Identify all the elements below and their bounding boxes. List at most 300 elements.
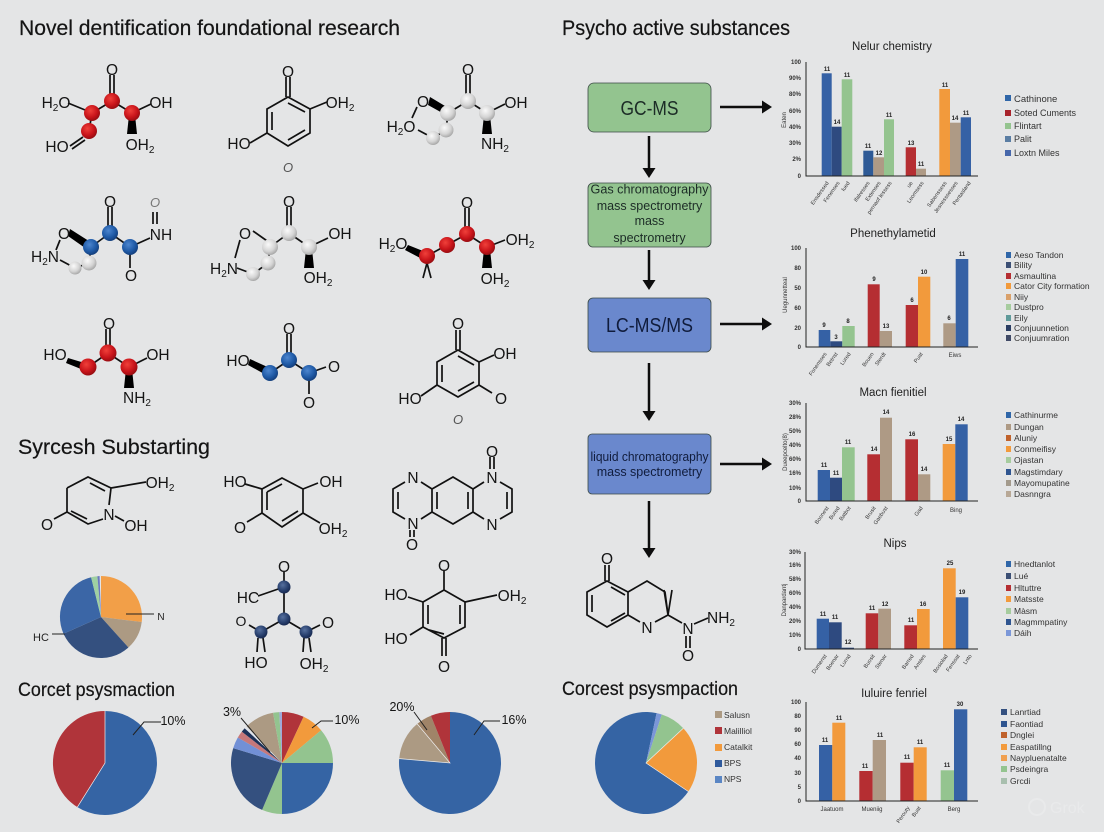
value labels: 11 bbox=[869, 606, 876, 612]
molecule: substituted ring: OH bbox=[319, 521, 342, 538]
molecule: red chain 1: OH bbox=[126, 137, 149, 154]
value labels: 11 bbox=[944, 763, 951, 769]
value labels: 14 bbox=[871, 447, 878, 453]
molecule: substituted ring: O bbox=[234, 520, 246, 537]
molecule: red chain 2: OH bbox=[506, 232, 529, 249]
molecule: bicyclic rings: O bbox=[486, 444, 498, 461]
heading: composition left: Corcet psysmaction bbox=[18, 680, 175, 701]
legend: Flintart bbox=[1014, 121, 1042, 131]
value labels: 16 bbox=[920, 602, 927, 608]
legend: Cathinone bbox=[1014, 94, 1057, 105]
value labels: 15 bbox=[946, 437, 953, 443]
molecule: white chain 2: OH bbox=[304, 270, 327, 287]
flow box: gas chromatography: Gas chromatography bbox=[590, 182, 709, 196]
molecule: white chain 1 bbox=[387, 62, 528, 155]
x labels: Jesnesssesses bbox=[933, 181, 960, 215]
legend: Lanrtiad bbox=[1010, 707, 1041, 717]
x labels: Eiws bbox=[949, 353, 961, 359]
molecule: red chain 2: H bbox=[379, 236, 390, 253]
molecule: red chain 3: 2 bbox=[145, 398, 151, 409]
y axis ticks: 5 bbox=[798, 785, 802, 791]
bars bbox=[817, 568, 968, 649]
value labels: 11 bbox=[917, 740, 924, 746]
x labels: Fenssat bbox=[945, 653, 962, 673]
legend: Magstimdary bbox=[1014, 467, 1063, 477]
y axis label: Danpardantj bbox=[782, 584, 788, 616]
y axis ticks: 40 bbox=[794, 756, 802, 762]
value labels: 19 bbox=[959, 590, 966, 596]
molecule: bicyclic amide: 2 bbox=[729, 618, 735, 629]
x labels: Lurnd bbox=[840, 654, 853, 669]
legend: Dustpro bbox=[1014, 302, 1044, 312]
y axis ticks: 60% bbox=[789, 457, 802, 463]
y axis ticks: 50 bbox=[794, 286, 802, 292]
y axis ticks: 30% bbox=[789, 401, 802, 407]
molecule: benzene ring 1: OH bbox=[326, 95, 349, 112]
x labels bbox=[814, 505, 962, 526]
value labels: 8 bbox=[846, 319, 850, 325]
y axis ticks: 100 bbox=[791, 60, 802, 66]
chart title: Iuluire fenriel bbox=[861, 688, 927, 700]
legend: Magmmpatiny bbox=[1014, 617, 1068, 627]
x labels: Bosiolad bbox=[933, 654, 950, 674]
molecule: white chain 1: H bbox=[387, 119, 398, 136]
value labels: 11 bbox=[844, 73, 851, 79]
value labels: 11 bbox=[918, 162, 925, 168]
x labels: Lnto bbox=[963, 654, 974, 666]
bars bbox=[819, 709, 967, 801]
molecule: bicyclic rings: O bbox=[406, 537, 418, 554]
value labels: 9 bbox=[822, 323, 826, 329]
molecule: benzene ring 2: O bbox=[453, 412, 463, 427]
molecule: blue chain 2: HO bbox=[226, 353, 250, 370]
pie: small composition bbox=[33, 576, 165, 658]
flow box: gas chromatography: mass spectrometry bbox=[597, 199, 703, 213]
value labels: 16 bbox=[909, 432, 916, 438]
y axis ticks: 0 bbox=[798, 799, 802, 805]
bars bbox=[822, 73, 971, 176]
heading: composition right: Corcest psysmpaction bbox=[562, 679, 738, 700]
y axis ticks bbox=[789, 401, 802, 505]
arrow: down 4 bbox=[642, 501, 656, 558]
watermark: Grok: Grok bbox=[1050, 800, 1086, 817]
molecule: white chain 1: O bbox=[417, 94, 429, 111]
molecule: pyridine ring: O bbox=[41, 517, 53, 534]
y axis ticks: 90 bbox=[794, 728, 802, 734]
value labels: 11 bbox=[886, 113, 893, 119]
x labels: Puat bbox=[913, 351, 925, 364]
legend: right composition: NPS bbox=[724, 774, 742, 784]
flow box: liquid chromatography: liquid chromatography bbox=[590, 450, 709, 464]
flow box: GC-MS bbox=[588, 83, 711, 132]
legend: Bility bbox=[1014, 260, 1033, 270]
legend: Easpatillng bbox=[1010, 742, 1052, 752]
value labels: 11 bbox=[959, 252, 966, 258]
molecule: blue chain 1: O bbox=[58, 226, 70, 243]
molecule: navy ball and stick: OH bbox=[300, 656, 323, 673]
molecule: white chain 2 bbox=[210, 194, 352, 289]
pie: mostly blue bbox=[389, 700, 527, 814]
molecule: bicyclic rings: N bbox=[486, 517, 498, 534]
x labels: Buosit bbox=[863, 653, 877, 670]
pie: multi slice: 10% bbox=[334, 713, 360, 727]
molecule: white chain 2: OH bbox=[328, 226, 352, 243]
value labels: 11 bbox=[877, 733, 884, 739]
legend: right composition: Malilliol bbox=[724, 726, 752, 736]
molecule: white chain 2: N bbox=[227, 261, 238, 278]
x labels: Stenar bbox=[874, 654, 889, 670]
chart title: Nelur chemistry bbox=[852, 41, 932, 53]
legend: Hltuttre bbox=[1014, 583, 1042, 593]
pie: two slice bbox=[53, 711, 186, 815]
y axis ticks: 2% bbox=[792, 157, 802, 163]
y axis ticks bbox=[791, 246, 802, 351]
bars bbox=[818, 418, 968, 501]
flow box: gas chromatography: spectrometry bbox=[613, 231, 686, 245]
x labels: Brusit bbox=[865, 505, 878, 521]
value labels: 3 bbox=[834, 335, 838, 341]
y axis ticks: 20% bbox=[789, 619, 802, 625]
arrow: down 1 bbox=[642, 136, 656, 178]
x labels: Perouty bbox=[896, 806, 912, 825]
chart title: Macn fienitiel bbox=[859, 387, 927, 399]
molecule: bicyclic amide: N bbox=[682, 621, 694, 638]
y axis ticks: 80% bbox=[789, 92, 802, 98]
value labels: 14 bbox=[834, 120, 841, 126]
molecule: red chain 2: O bbox=[461, 195, 473, 212]
value labels: 12 bbox=[876, 151, 883, 157]
legend: Matsste bbox=[1014, 594, 1044, 604]
legend: Conmeifisy bbox=[1014, 444, 1057, 454]
legend: Loxtn Miles bbox=[1014, 148, 1060, 158]
molecule: white chain 1: O bbox=[403, 119, 415, 136]
y axis ticks: 0 bbox=[798, 499, 802, 505]
y axis ticks: 0 bbox=[798, 174, 802, 180]
watermark: Grok bbox=[1029, 799, 1086, 817]
x labels: Mueniig bbox=[861, 807, 883, 813]
y axis ticks: 16% bbox=[789, 471, 802, 477]
molecule: substituted ring: 2 bbox=[342, 529, 348, 540]
molecule: quinone ring: HO bbox=[384, 631, 408, 648]
molecule: red chain 2: 2 bbox=[504, 279, 510, 290]
value labels bbox=[821, 410, 965, 477]
molecule: blue chain 1 bbox=[31, 194, 172, 285]
molecule: red chain 2: O bbox=[395, 236, 407, 253]
pie: small composition: HC bbox=[33, 632, 49, 644]
molecule: benzene ring 1: O bbox=[282, 64, 294, 81]
legend: Conjuumration bbox=[1014, 333, 1070, 343]
x labels bbox=[808, 351, 961, 377]
molecule: red chain 1: H bbox=[42, 95, 53, 112]
x labels: Bouen bbox=[862, 352, 876, 368]
value labels: 11 bbox=[862, 764, 869, 770]
value labels: 11 bbox=[865, 144, 872, 150]
molecule: bicyclic rings: N bbox=[486, 470, 498, 487]
molecule: benzene ring 2: O bbox=[495, 391, 507, 408]
legend: right composition: BPS bbox=[724, 758, 741, 768]
x labels: Jaatuom bbox=[820, 807, 844, 813]
y axis ticks: 10% bbox=[789, 486, 802, 492]
pie: mostly blue: 20% bbox=[389, 700, 415, 714]
molecule: benzene ring 1: HO bbox=[227, 136, 251, 153]
pie: right composition bbox=[595, 712, 697, 814]
y axis ticks: 28% bbox=[789, 415, 802, 421]
x labels: ue bbox=[906, 181, 915, 189]
axes bbox=[806, 62, 978, 176]
y axis ticks: 80 bbox=[794, 714, 802, 720]
molecule: red chain 1: 2 bbox=[149, 145, 155, 156]
y axis ticks: 60% bbox=[789, 591, 802, 597]
legend: Soted Cuments bbox=[1014, 108, 1077, 118]
molecule: quinone ring: 2 bbox=[521, 596, 527, 607]
legend bbox=[1006, 250, 1090, 343]
molecule: white chain 1: OH bbox=[504, 95, 528, 112]
y axis ticks: 90% bbox=[789, 76, 802, 82]
molecule: red chain 3 bbox=[43, 316, 170, 409]
molecule: blue chain 2: O bbox=[283, 321, 295, 338]
y axis ticks: 60% bbox=[789, 109, 802, 115]
x labels: Dumenst bbox=[811, 653, 829, 675]
legend: Niiy bbox=[1014, 292, 1029, 302]
value labels: 6 bbox=[947, 316, 951, 322]
x labels: Ensdessed bbox=[810, 181, 831, 206]
x labels: Sterdt bbox=[874, 351, 888, 367]
x labels: Fonensses bbox=[808, 352, 829, 377]
arrow: liquid chromatography to chart bbox=[720, 458, 772, 470]
legend bbox=[1005, 94, 1077, 158]
y axis ticks: 16% bbox=[789, 563, 802, 569]
x labels: Gad bbox=[914, 506, 925, 518]
molecule: bicyclic amide: O bbox=[601, 551, 613, 568]
molecule: red chain 2: OH bbox=[481, 271, 504, 288]
chart title: Phenethylametid bbox=[850, 228, 936, 240]
value labels: 14 bbox=[921, 467, 928, 473]
y axis ticks: 60 bbox=[794, 306, 802, 312]
x labels: Leomsess bbox=[906, 181, 926, 205]
arrow: GC-MS to chart bbox=[720, 100, 772, 114]
flow box: gas chromatography bbox=[588, 182, 711, 247]
legend: Asmaultina bbox=[1014, 271, 1056, 281]
y axis ticks: 40% bbox=[789, 443, 802, 449]
legend: Dungan bbox=[1014, 422, 1044, 432]
molecule: benzene ring 2 bbox=[398, 316, 517, 427]
molecule: blue chain 2: O bbox=[303, 395, 315, 412]
molecule: navy ball and stick: O bbox=[278, 559, 290, 576]
molecule: blue chain 1: 2 bbox=[42, 257, 48, 268]
molecule: pyridine ring: 2 bbox=[169, 483, 175, 494]
molecule: benzene ring 1 bbox=[227, 64, 355, 175]
legend: Hnedtanlot bbox=[1014, 559, 1056, 569]
value labels: 9 bbox=[872, 277, 876, 283]
pie: multi slice: 3% bbox=[223, 705, 241, 719]
arrow: down 3 bbox=[642, 363, 656, 421]
bars bbox=[819, 259, 968, 347]
value labels: 12 bbox=[845, 640, 852, 646]
value labels: 14 bbox=[958, 417, 965, 423]
value labels: 11 bbox=[833, 471, 840, 477]
molecule: white chain 1: 2 bbox=[503, 144, 509, 155]
value labels bbox=[820, 561, 966, 646]
y axis ticks bbox=[789, 60, 802, 180]
molecule: bicyclic amide: N bbox=[641, 620, 653, 637]
x labels: Buat bbox=[911, 805, 923, 818]
x labels: Barred bbox=[901, 654, 916, 671]
legend: Eily bbox=[1014, 313, 1028, 323]
legend: Màsm bbox=[1014, 606, 1037, 616]
chart: Nips bbox=[782, 538, 1068, 675]
molecule: navy ball and stick bbox=[236, 559, 334, 675]
molecule: blue chain 2: O bbox=[328, 359, 340, 376]
x labels: Pentasland bbox=[952, 181, 973, 207]
molecule: blue chain 1: O bbox=[125, 268, 137, 285]
y axis ticks: 30% bbox=[789, 141, 802, 147]
legend: right composition: Catalkit bbox=[724, 742, 753, 752]
value labels: 11 bbox=[820, 612, 827, 618]
molecule: red chain 2: 2 bbox=[529, 240, 535, 251]
pie: multi slice bbox=[223, 705, 360, 814]
flow box: gas chromatography: mass bbox=[635, 214, 664, 228]
value labels bbox=[824, 67, 970, 168]
molecule: navy ball and stick: HO bbox=[244, 655, 268, 672]
molecule: benzene ring 1: O bbox=[283, 160, 293, 175]
y axis ticks: 80 bbox=[794, 266, 802, 272]
flow box: liquid chromatography bbox=[588, 434, 711, 494]
x labels bbox=[820, 805, 960, 825]
y axis ticks: 100 bbox=[791, 700, 802, 706]
value labels: 13 bbox=[908, 141, 915, 147]
molecule: substituted ring bbox=[223, 474, 348, 540]
molecule: white chain 2: 2 bbox=[327, 278, 333, 289]
molecule: bicyclic rings: N bbox=[407, 470, 419, 487]
molecule: red chain 3: NH bbox=[123, 390, 145, 407]
molecule: pyridine ring bbox=[41, 475, 175, 535]
value labels bbox=[822, 252, 966, 341]
molecule: red chain 1: 2 bbox=[53, 103, 59, 114]
y axis ticks bbox=[791, 700, 802, 805]
molecule: bicyclic amide bbox=[587, 551, 735, 665]
legend: Aeso Tandon bbox=[1014, 250, 1064, 260]
chart: Phenethylametid bbox=[783, 228, 1090, 377]
molecule: pyridine ring: N bbox=[103, 507, 115, 524]
molecule: white chain 1: O bbox=[462, 62, 474, 79]
legend: right composition: Salusn bbox=[724, 710, 750, 720]
x labels: lued bbox=[841, 181, 852, 193]
x labels bbox=[811, 653, 974, 675]
legend: Aluniy bbox=[1014, 433, 1038, 443]
molecule: red chain 3: OH bbox=[146, 347, 170, 364]
molecule: benzene ring 2: HO bbox=[398, 391, 422, 408]
molecule: navy ball and stick: O bbox=[236, 613, 247, 629]
heading: synthesis: Syrcesh Substarting bbox=[18, 436, 210, 459]
molecule: pyridine ring: OH bbox=[146, 475, 169, 492]
value labels: 11 bbox=[836, 716, 843, 722]
molecule: white chain 2: O bbox=[239, 226, 251, 243]
legend: Conjuunnetion bbox=[1014, 323, 1069, 333]
arrow: down 2 bbox=[642, 250, 656, 290]
legend bbox=[1006, 559, 1068, 638]
molecule: blue chain 1: O bbox=[104, 194, 116, 211]
y axis label: Uegunnetteal bbox=[783, 277, 789, 313]
x labels: Boenar bbox=[826, 654, 841, 672]
x labels: Anstes bbox=[913, 654, 928, 671]
molecule: quinone ring: O bbox=[438, 558, 450, 575]
legend: Grcdi bbox=[1010, 776, 1030, 786]
x labels: Berg bbox=[948, 807, 960, 813]
value labels: 10 bbox=[921, 270, 928, 276]
molecule: red chain 3: O bbox=[103, 316, 115, 333]
value labels: 11 bbox=[832, 615, 839, 621]
x labels: Boonest bbox=[814, 505, 831, 526]
y axis ticks: 50% bbox=[789, 429, 802, 435]
x labels: Batbot bbox=[839, 505, 853, 522]
molecule: white chain 2: 2 bbox=[221, 269, 227, 280]
y axis ticks: 58% bbox=[789, 577, 802, 583]
molecule: blue chain 2 bbox=[226, 321, 340, 412]
value labels bbox=[822, 702, 964, 770]
x labels: Betnst bbox=[826, 351, 840, 368]
x labels: Ifalresses bbox=[853, 181, 872, 203]
molecule: navy ball and stick: 2 bbox=[323, 664, 329, 675]
legend: Psdeingra bbox=[1010, 764, 1049, 774]
value labels: 11 bbox=[963, 111, 970, 117]
value labels: 11 bbox=[824, 67, 831, 73]
molecule: bicyclic rings bbox=[393, 444, 512, 554]
molecule: red chain 2: 2 bbox=[390, 244, 396, 255]
flow box: LC-MS/MS: LC-MS/MS bbox=[606, 315, 693, 337]
y axis ticks: 0 bbox=[798, 345, 802, 351]
molecule: red chain 1: OH bbox=[149, 95, 173, 112]
value labels: 14 bbox=[883, 410, 890, 416]
molecule: blue chain 1: O bbox=[150, 195, 160, 210]
y axis ticks: 10% bbox=[789, 633, 802, 639]
legend bbox=[1006, 410, 1070, 499]
y axis ticks: 0 bbox=[798, 647, 802, 653]
value labels: 6 bbox=[910, 298, 914, 304]
x labels: Bing bbox=[950, 508, 962, 514]
y axis ticks: 40% bbox=[789, 125, 802, 131]
value labels: 11 bbox=[845, 440, 852, 446]
chart title: Nips bbox=[883, 538, 907, 550]
molecule: quinone ring: O bbox=[438, 659, 450, 676]
heading: novel identification: Novel dentification foundational research bbox=[19, 17, 400, 40]
molecule: white chain 1: 2 bbox=[398, 127, 404, 138]
legend: Faontiad bbox=[1010, 719, 1043, 729]
y axis ticks: 20 bbox=[794, 326, 802, 332]
pie: mostly blue: 16% bbox=[501, 713, 527, 727]
legend: Dnglei bbox=[1010, 730, 1034, 740]
molecule: white chain 2: H bbox=[210, 261, 221, 278]
flow box: GC-MS: GC-MS bbox=[620, 98, 678, 120]
pie: two slice: 10% bbox=[160, 714, 186, 728]
value labels: 12 bbox=[882, 602, 889, 608]
value labels: 30 bbox=[957, 702, 964, 708]
axes bbox=[806, 248, 978, 347]
molecule: white chain 1: NH bbox=[481, 136, 503, 153]
value labels: 13 bbox=[883, 324, 890, 330]
molecule: pyridine ring: OH bbox=[124, 518, 148, 535]
axes bbox=[806, 403, 978, 501]
y axis ticks: 40% bbox=[789, 605, 802, 611]
y axis ticks: 30% bbox=[789, 550, 802, 556]
x labels: Fenenses bbox=[823, 181, 842, 204]
molecule: red chain 1: O bbox=[58, 95, 70, 112]
value labels: 11 bbox=[822, 738, 829, 744]
y axis label: Eaten bbox=[782, 112, 788, 128]
x labels bbox=[810, 181, 973, 216]
legend: Cator City formation bbox=[1014, 281, 1090, 291]
pie: small composition: N bbox=[157, 612, 165, 623]
y axis ticks: 30 bbox=[794, 771, 802, 777]
